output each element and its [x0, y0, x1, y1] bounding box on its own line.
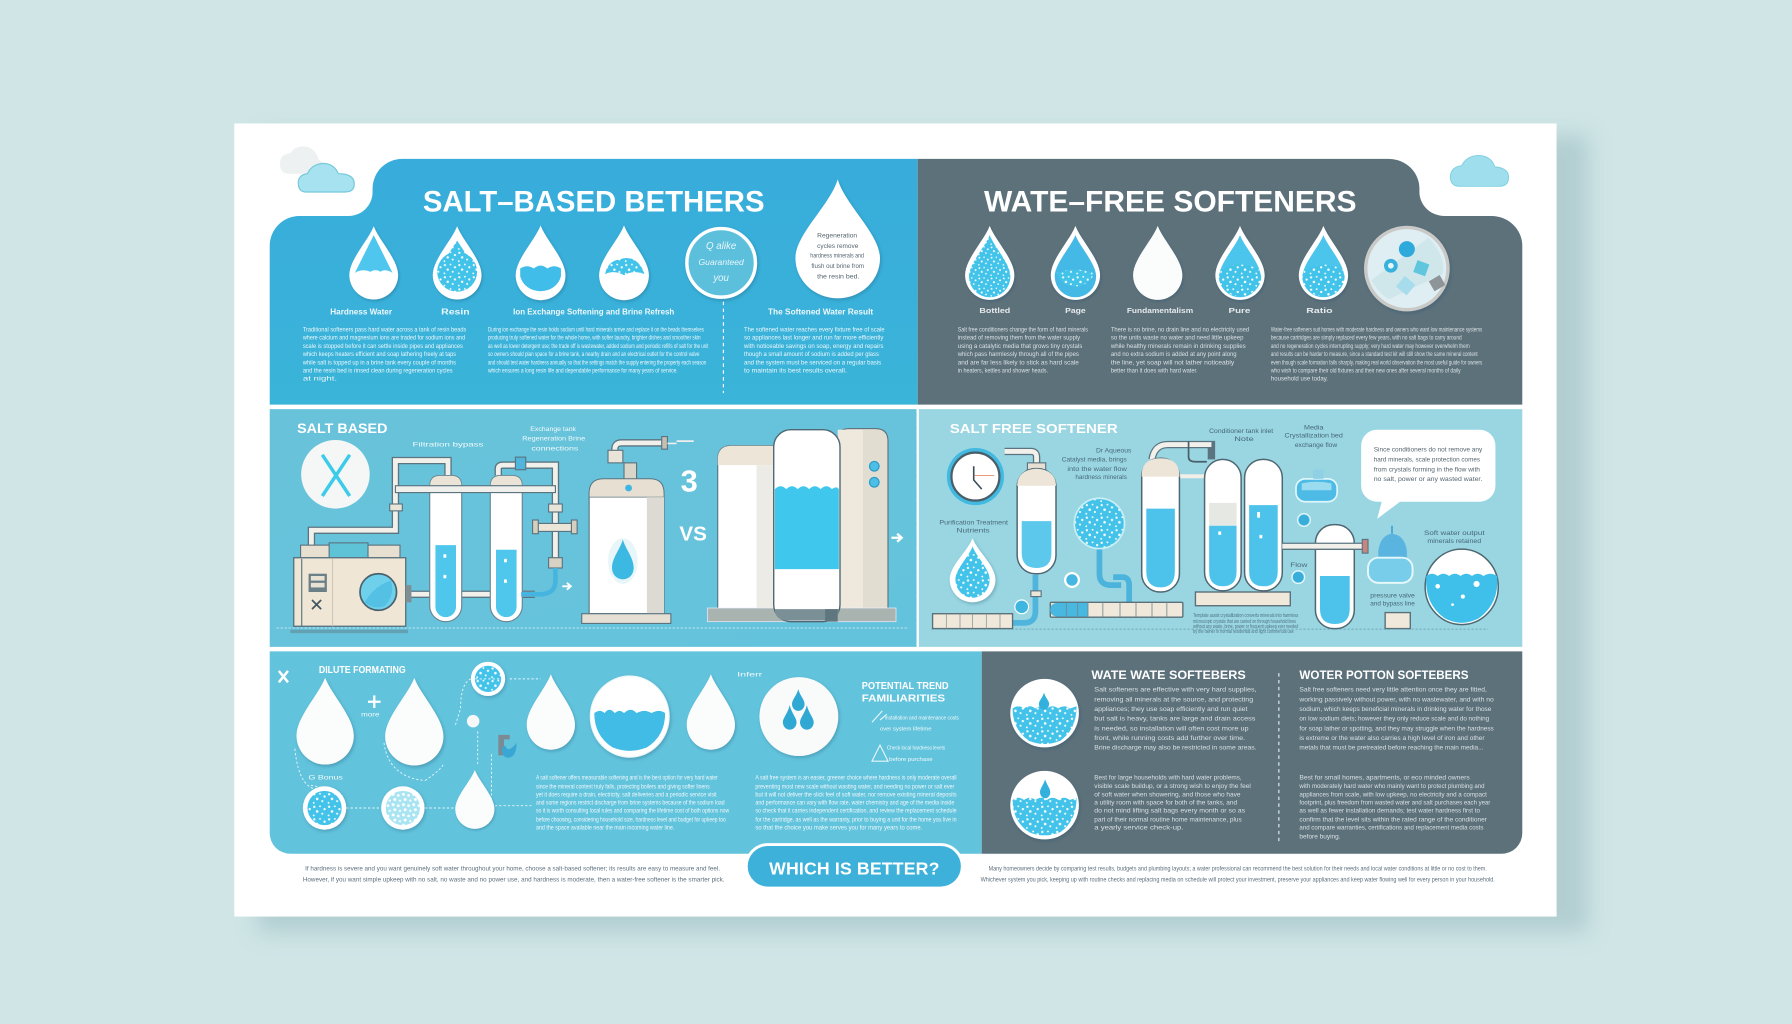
bubble text: Since conditioners do not remove any	[1374, 446, 1483, 453]
text block: middle paragraph: before choosing, considering household size, hardness level and budget for upkeep too	[536, 816, 726, 823]
heading: salt based: SALT BASED	[297, 421, 387, 437]
panel: bottom-right comparison	[982, 651, 1522, 854]
icon: round badge	[687, 229, 755, 297]
text block: column 3: and the system must be serviced on a regular basis	[744, 359, 881, 366]
icon: drop with salt dots	[433, 226, 482, 299]
text block: B1: metals that must be pretreated before reaching the main media...	[1299, 745, 1484, 752]
icon: plus: more	[361, 712, 380, 719]
text block: column 2: so the units waste no water and need little upkeep	[1111, 335, 1244, 342]
icon: tank D	[1245, 459, 1282, 591]
crossbar	[395, 486, 555, 493]
icon: tank C	[1205, 459, 1241, 591]
text block: B2	[1298, 774, 1491, 840]
label: softener names: Pure	[1229, 306, 1250, 315]
bubble text: no salt, power or any wasted water.	[1374, 476, 1483, 483]
icon: strip 2	[1050, 602, 1183, 617]
icon: small ring	[1065, 573, 1079, 587]
callout text: right: Soft water output	[1424, 530, 1485, 537]
text block: column 2: better than it does with hard water.	[1111, 368, 1198, 375]
text block: column 1	[302, 326, 466, 383]
icon: dotted media sphere	[1074, 498, 1129, 602]
footer text: left	[303, 865, 725, 884]
text block: A1: Brine discharge may also be restricted in some areas.	[1094, 745, 1257, 752]
text block: column 1: which keeps heaters efficient and soap lathering freely at taps	[302, 351, 456, 358]
text block: B1: is extreme or the water also carries a high level of iron and other	[1299, 735, 1485, 742]
panel: salt-based overview	[270, 159, 918, 405]
icon: dotted drop	[950, 538, 995, 602]
text block: column 2: During ion exchange the resin holds sodium until hard minerals arrive and replace it on the beads themselves	[488, 326, 704, 333]
text block: A2: do not mind lifting salt bags every month or so as	[1094, 808, 1245, 815]
text block: A1	[1094, 686, 1257, 752]
callout text: above drop	[939, 520, 1008, 535]
text block: middle paragraph: and the space available near the main incoming water line.	[536, 825, 674, 832]
text block: column 3: household use today.	[1271, 376, 1328, 383]
button: which is better	[746, 845, 962, 888]
bubble text: hard minerals, scale protection comes	[1374, 456, 1480, 463]
text block: middle paragraph	[536, 774, 729, 832]
text block: right paragraph: but it will not deliver the slick feel of soft water, nor remove existing mineral deposits	[755, 792, 957, 799]
icon: clock	[947, 448, 1004, 505]
text block: column 3: and no regeneration cycles interrupting supply; very hard water may however overwhelm them	[1271, 343, 1470, 350]
text block: B2: with moderately hard water who mainly want to protect plumbing and	[1298, 783, 1485, 790]
text block: column 2: producing truly softened water for the whole home, with softer laundry, brighter dishes and smoother skin	[488, 335, 701, 342]
text block: B1: on low sodium diets; however they only reduce scale and do nothing	[1299, 716, 1490, 723]
icon list: notes: before purchase	[889, 757, 933, 763]
callout text: tanks top: exchange flow	[1295, 442, 1337, 449]
bubble text: from crystals forming in the flow with	[1374, 466, 1480, 473]
text block: A2: a yearly service check-up.	[1094, 825, 1184, 832]
text block: right paragraph: A salt free system is an easier, greener choice where hardness is only moderate overall	[755, 774, 957, 781]
footer text: left: However, if you want simple upkeep with no salt, no waste and no power use, and hardness is moderate, then a water-free softener is the smarter pick.	[303, 877, 725, 884]
text block: A1: front, while running costs add further over time.	[1094, 735, 1245, 742]
heading: column B: WOTER POTTON SOFTEBERS	[1299, 668, 1469, 682]
text block: column 3: so appliances last longer and run far more efficiently	[744, 335, 884, 342]
callout text: near clock	[1062, 448, 1132, 481]
icon: drop 2	[1051, 226, 1100, 300]
text block: column 1: which pass harmlessly through all of the pipes	[957, 351, 1079, 358]
callout text: pipe labels: Filtration bypass	[413, 441, 484, 448]
label: inferr: Inferr	[737, 672, 763, 679]
text block: column 3: and results can be harder to measure, since a standard test kit will still show the same mineral content	[1271, 351, 1478, 358]
icon: resin tube 1	[430, 475, 462, 622]
label: bonus: G Bonus	[309, 774, 344, 781]
icon: tanks base	[1195, 592, 1290, 606]
pipes: tank group	[1152, 441, 1211, 478]
text block: middle paragraph: and some regions restrict discharge from brine systems because of the sodium load	[536, 800, 725, 807]
icon: drop 5	[1299, 226, 1348, 300]
text block: column 1: using a catalytic media that grows tiny crystals	[958, 343, 1082, 350]
text block: B2: appliances from scale, with low upkeep, no electricity and a compact	[1299, 792, 1487, 799]
icon: drop 3	[527, 674, 575, 750]
callout text: pipe labels: connections	[531, 445, 579, 452]
callout text: right: and bypass line	[1370, 601, 1415, 608]
callout text: near clock: Catalyst media, brings	[1062, 457, 1127, 464]
text block: B1: sodium, which keeps beneficial minerals in drinking water for those	[1299, 706, 1492, 713]
text block: under tanks	[1193, 613, 1299, 635]
text block: middle paragraph: since the mineral content truly falls, protecting boilers and giving softer linens	[536, 783, 710, 790]
callout text: cycles remove	[817, 243, 859, 250]
icon: water bowl 1	[1010, 679, 1079, 747]
footer text: right: Whichever system you pick, keeping up with routine checks and replacing media on schedule will protect your investment, preserve your appliances and keep water flowing well for every person in your household.	[981, 877, 1495, 884]
badge text	[699, 241, 744, 284]
text block: column 3: Water-free softeners suit homes with moderate hardness and owners who want low maintenance systems	[1271, 326, 1482, 333]
ground line	[277, 627, 909, 629]
callout text: tanks top: Conditioner tank inlet	[1209, 428, 1273, 435]
icon: large drop 1	[296, 678, 354, 765]
text block: column 1: and the resin bed is rinsed clean during regeneration cycles	[303, 368, 453, 375]
text block: column 3: with noticeable savings on soap, energy and repairs	[743, 343, 883, 350]
icon: dots	[1290, 514, 1310, 583]
icon: beige block	[1385, 613, 1410, 629]
text block: column 1: at night.	[303, 376, 337, 383]
icon: tube E with pipe	[1282, 525, 1368, 629]
label: versus: VS	[679, 523, 707, 546]
callout text	[810, 233, 864, 280]
connector dashes	[295, 679, 541, 809]
text block: B1	[1298, 686, 1494, 752]
text block: B2: Best for small homes, apartments, or eco minded owners	[1299, 774, 1470, 781]
heading: water-free: WATE–FREE SOFTENERS	[984, 185, 1357, 218]
footer text: right	[981, 865, 1495, 884]
text block: A2: Best for large households with hard water problems,	[1094, 774, 1242, 781]
icon: tank A	[1017, 469, 1056, 574]
icon: tank B	[1142, 458, 1179, 592]
callout text: tanks top: Media	[1304, 425, 1324, 432]
icon: machine unit	[294, 543, 411, 626]
icon: crystal disc	[1366, 227, 1448, 310]
panel: salt-based system diagram	[270, 409, 917, 647]
heading: right of circle: POTENTIAL TREND	[862, 681, 949, 692]
text block: B1: for soap lather or spotting, and they may struggle when the hardness	[1299, 725, 1494, 732]
icon: clouds top left	[280, 146, 354, 192]
icon: blue dotted disc	[303, 786, 346, 830]
callout text: pipe labels: Regeneration Brine	[522, 436, 585, 443]
text block: column 2: which ensures a long resin life and dependable performance for many years of service.	[487, 368, 678, 375]
label: softener names: Fundamentalism	[1127, 306, 1194, 315]
callout text: tanks top: Note	[1234, 436, 1254, 443]
icon: drop 4	[1215, 226, 1265, 300]
label: softener names	[979, 306, 1333, 315]
text block: right paragraph: for the cartridge, as well as the warranty, prior to buying a unit for the home you live in	[755, 816, 957, 823]
icon: bottom-left strip	[933, 614, 1013, 629]
callout text: right: minerals retained	[1427, 538, 1481, 545]
heading: salt free softener: SALT FREE SOFTENER	[950, 421, 1118, 436]
text block: column 1: Traditional softeners pass hard water across a tank of resin beads	[303, 326, 466, 333]
label: softener names: Bottled	[979, 306, 1011, 315]
text block: under tanks: without any waste, brine, power or frequent upkeep ever needed	[1193, 624, 1298, 630]
text block: right paragraph: preventing most new scale without wasting water, and needing no power or salt ever	[755, 783, 955, 790]
callout bubble	[1361, 430, 1495, 519]
icon: no-salt circle	[301, 440, 370, 509]
text block: B1: Salt free softeners need very little attention once they are fitted,	[1299, 686, 1487, 693]
text block: column 3: though a small amount of sodium is added per glass	[744, 351, 879, 358]
icon list: notes	[872, 711, 959, 763]
badge text: Q alike	[706, 241, 737, 252]
pipes: machine to first tube	[311, 457, 555, 594]
label: resin: Resin	[441, 307, 470, 316]
text block: A2: of soft water when showering, and those who have	[1094, 792, 1241, 799]
icon: valve and outlet	[521, 504, 577, 594]
ground line	[931, 628, 1488, 630]
label: softener names: Ratio	[1306, 306, 1333, 315]
text block: B2: footprint, plus freedom from wasted water and salt purchases each year	[1299, 800, 1491, 807]
text block: column 3: to maintain its best results overall.	[744, 368, 847, 375]
icon: top dotted circle	[471, 662, 505, 696]
icon: drop 4	[687, 674, 735, 750]
text block: B2: as well as fewer installation demands; test water hardness first to	[1299, 808, 1480, 815]
text block: column 3: because cartridges are simply replaced every few years, with no salt bags to carry around	[1271, 335, 1462, 342]
text block: column 2: as well as lower detergent use; the trade off is wastewater, added sodium and periodic refills of salt for the unit	[488, 343, 709, 350]
text block: under tanks: microscopic crystals that are carried on through household lines	[1193, 619, 1296, 625]
text block: middle paragraph: so it is worth consulting local rules and comparing the lifetime cost of both options now	[536, 808, 729, 815]
icon: water level circle	[590, 676, 669, 757]
badge text: Guaranteed	[699, 257, 744, 267]
label: number three: 3	[681, 463, 698, 498]
heading: dilute formatting: DILUTE FORMATING	[319, 665, 406, 676]
badge text: you	[712, 273, 730, 284]
text block: column 2	[487, 326, 709, 375]
callout text: near clock: Dr Aqueous	[1096, 448, 1132, 455]
text block: middle paragraph: yet it does require a drain, electricity, salt deliveries and a periodic service visit	[536, 792, 717, 799]
panel: salt-free system diagram	[917, 409, 1522, 647]
text block: A1: appliances; they use soap efficiently and run quiet	[1094, 706, 1248, 713]
icon: small white dot	[467, 715, 479, 727]
label: exchange: Ion Exchange Softening and Brine Refresh	[513, 307, 674, 316]
text block: column 1: in heaters, kettles and shower heads.	[958, 368, 1048, 375]
label: process: Hardness Water	[330, 307, 392, 316]
icon: cloud top right	[1450, 155, 1509, 186]
text block: column 1: Salt free conditioners change the form of hard minerals	[958, 326, 1088, 333]
callout text: pipe labels: Exchange tank	[530, 426, 577, 433]
text block: column 1: and are far less likely to stick as hard scale	[958, 359, 1079, 366]
callout text: hardness minerals and	[810, 253, 864, 260]
text block: A2: visible scale buildup, or a strong wish to enjoy the feel	[1094, 783, 1251, 790]
text block: middle paragraph: A salt softener offers measurable softening and is the best option for very hard water	[536, 774, 718, 781]
heading: right of circle	[862, 681, 949, 705]
heading: column A: WATE WATE SOFTEBERS	[1091, 668, 1246, 682]
icon: water tank	[582, 437, 694, 623]
text block: column 2: and no extra sodium is added at any point along	[1111, 351, 1237, 358]
text block: column 1: while salt is topped up in a brine tank every couple of months	[302, 359, 456, 366]
heading: salt-based: SALT–BASED BETHERS	[423, 185, 765, 218]
icon: dots: Flow	[1290, 562, 1307, 569]
text block: B2: confirm that the level sits within the rated range of the conditioner	[1299, 816, 1488, 823]
icon: drop half full of water	[516, 226, 565, 300]
callout text: above drop: Nutrients	[957, 528, 990, 535]
text block: A2	[1094, 774, 1251, 832]
icon: three drops circle	[759, 677, 838, 756]
icon: blue bell	[1368, 526, 1413, 583]
divider: dashed	[916, 409, 918, 647]
text block: column 3	[1270, 326, 1482, 383]
callout text: Regeneration	[817, 233, 858, 240]
text block: column 2: and should test water hardness annually so that the settings match the supply entering the property each season	[488, 359, 707, 366]
callout text: tanks top	[1209, 425, 1343, 449]
text block: column 1: instead of removing them from the water supply	[958, 335, 1081, 342]
text block: column 1	[957, 326, 1088, 375]
footer text: right: Many homeowners decide by comparing test results, budgets and plumbing layouts; a water professional can recommend the best solution for their needs and local water conditions at little or no cost to them.	[989, 865, 1487, 872]
icon: drop 5	[455, 770, 494, 829]
text block: A1: is needed, so installation will often cost more up	[1094, 725, 1249, 732]
white card	[234, 123, 1557, 917]
panel: bottom-left benefits	[270, 651, 982, 854]
icon: small vessel	[1296, 470, 1337, 502]
label: softener names: Page	[1065, 306, 1086, 315]
icon: water circle	[1425, 549, 1498, 625]
text block: A1: Salt softeners are effective with very hard supplies,	[1094, 686, 1257, 693]
text block: column 3: who wish to compare their old fixtures and their new ones after several months of daily	[1270, 368, 1461, 375]
icon: resin tube 2	[490, 475, 522, 622]
text block: right paragraph: so that the choice you make serves you for many years to come.	[755, 825, 922, 832]
callout text: right: pressure valve	[1370, 593, 1415, 600]
text block: column 2: while healthy minerals remain in drinking supplies	[1110, 343, 1246, 350]
icon list: notes: Check local hardness levels	[887, 746, 945, 752]
icon: plus	[361, 695, 381, 719]
heading: right of circle: FAMILIARITIES	[862, 694, 946, 705]
text block: under tanks: by the owner in normal residential and light commercial use	[1193, 629, 1294, 635]
text block: right paragraph	[755, 774, 957, 832]
icon: plain white drop	[1133, 226, 1182, 300]
bubble text	[1374, 446, 1483, 483]
icon: dotted drop 1	[965, 226, 1014, 300]
text block: under tanks: Template assist crystallization converts minerals into harmless	[1193, 613, 1299, 619]
label: results: The Softened Water Result	[768, 307, 873, 316]
callout text: near clock: hardness minerals	[1075, 474, 1127, 481]
text block: right paragraph: so check that it carries independent certification, and review the replacement schedule	[755, 808, 957, 815]
text block: A2: part of their normal routine home maintenance, plus	[1094, 816, 1242, 823]
icon: light dotted disc	[381, 786, 425, 830]
callout text: right	[1370, 530, 1485, 608]
icon: drop with blue cone	[349, 226, 398, 299]
text block: column 2: There is no brine, no drain line and no electricity used	[1111, 326, 1250, 333]
text block: column 2: the line, yet soap will not lather noticeably	[1111, 359, 1235, 366]
text block: column 3: even though scale formation falls sharply, making real world observation the most useful guide for owners	[1271, 359, 1482, 366]
icon: big softener tanks	[707, 429, 896, 622]
callout text: flush out brine from	[811, 263, 864, 270]
icon: water bowl 2	[1010, 771, 1079, 839]
text block: A2: a utility room with space for both of the tanks, and	[1094, 800, 1238, 807]
text block: A1: but salt is heavy, tanks are large and drain access	[1094, 716, 1255, 723]
button: which is better: WHICH IS BETTER?	[769, 858, 939, 878]
panel: water-free overview	[918, 159, 1522, 405]
icon: tools x	[279, 671, 288, 682]
icon: small arrow	[891, 534, 902, 542]
text block: column 1: where calcium and magnesium ions are traded for sodium ions and	[302, 335, 466, 342]
icon list: notes: Installation and maintenance costs	[885, 715, 959, 721]
callout text: the resin bed.	[817, 273, 860, 280]
pipe: blue drain	[1013, 575, 1041, 623]
icon: faucet	[498, 735, 517, 758]
card shadow	[257, 135, 1589, 933]
text block: right paragraph: and performance can vary with flow rate, water chemistry and age of the media inside	[755, 800, 955, 807]
text block: B2: before buying.	[1299, 833, 1341, 840]
icon: large drop 2	[385, 678, 443, 765]
text block: column 2	[1110, 326, 1250, 375]
divider: dashed	[722, 302, 724, 393]
divider: dashed	[1278, 673, 1280, 841]
callout text: tanks top: Crystallization bed	[1285, 433, 1343, 440]
icon: drop with mineral band	[599, 226, 649, 300]
pipe: clock tube	[1005, 451, 1046, 470]
callout text: pipe labels	[413, 426, 585, 452]
text block: column 1: scale is stopped before it can settle inside pipes and appliances	[303, 343, 463, 350]
text block: column 3: The softened water reaches every fixture free of scale	[744, 326, 885, 333]
text block: A1: removing all minerals at the source, and protecting	[1094, 697, 1254, 704]
icon list: notes: over system lifetime	[880, 726, 931, 732]
text block: column 2: so owners should plan space for a brine tank, a nearby drain and an electrical outlet for the control valve	[488, 351, 700, 358]
text block: B1: working passively without power, with no wastewater, and with no	[1298, 697, 1494, 704]
text block: column 3	[743, 326, 885, 375]
text block: B2: and compare warranties, certifications and replacement media costs	[1299, 825, 1483, 832]
icon: large drop callout	[795, 179, 880, 298]
callout text: near clock: into the water flow	[1067, 466, 1127, 473]
callout text: above drop: Purification Treatment	[939, 520, 1008, 527]
footer text: left: If hardness is severe and you want genuinely soft water throughout your home, choose a salt-based softener; its results are easy to measure and feel.	[305, 865, 720, 872]
